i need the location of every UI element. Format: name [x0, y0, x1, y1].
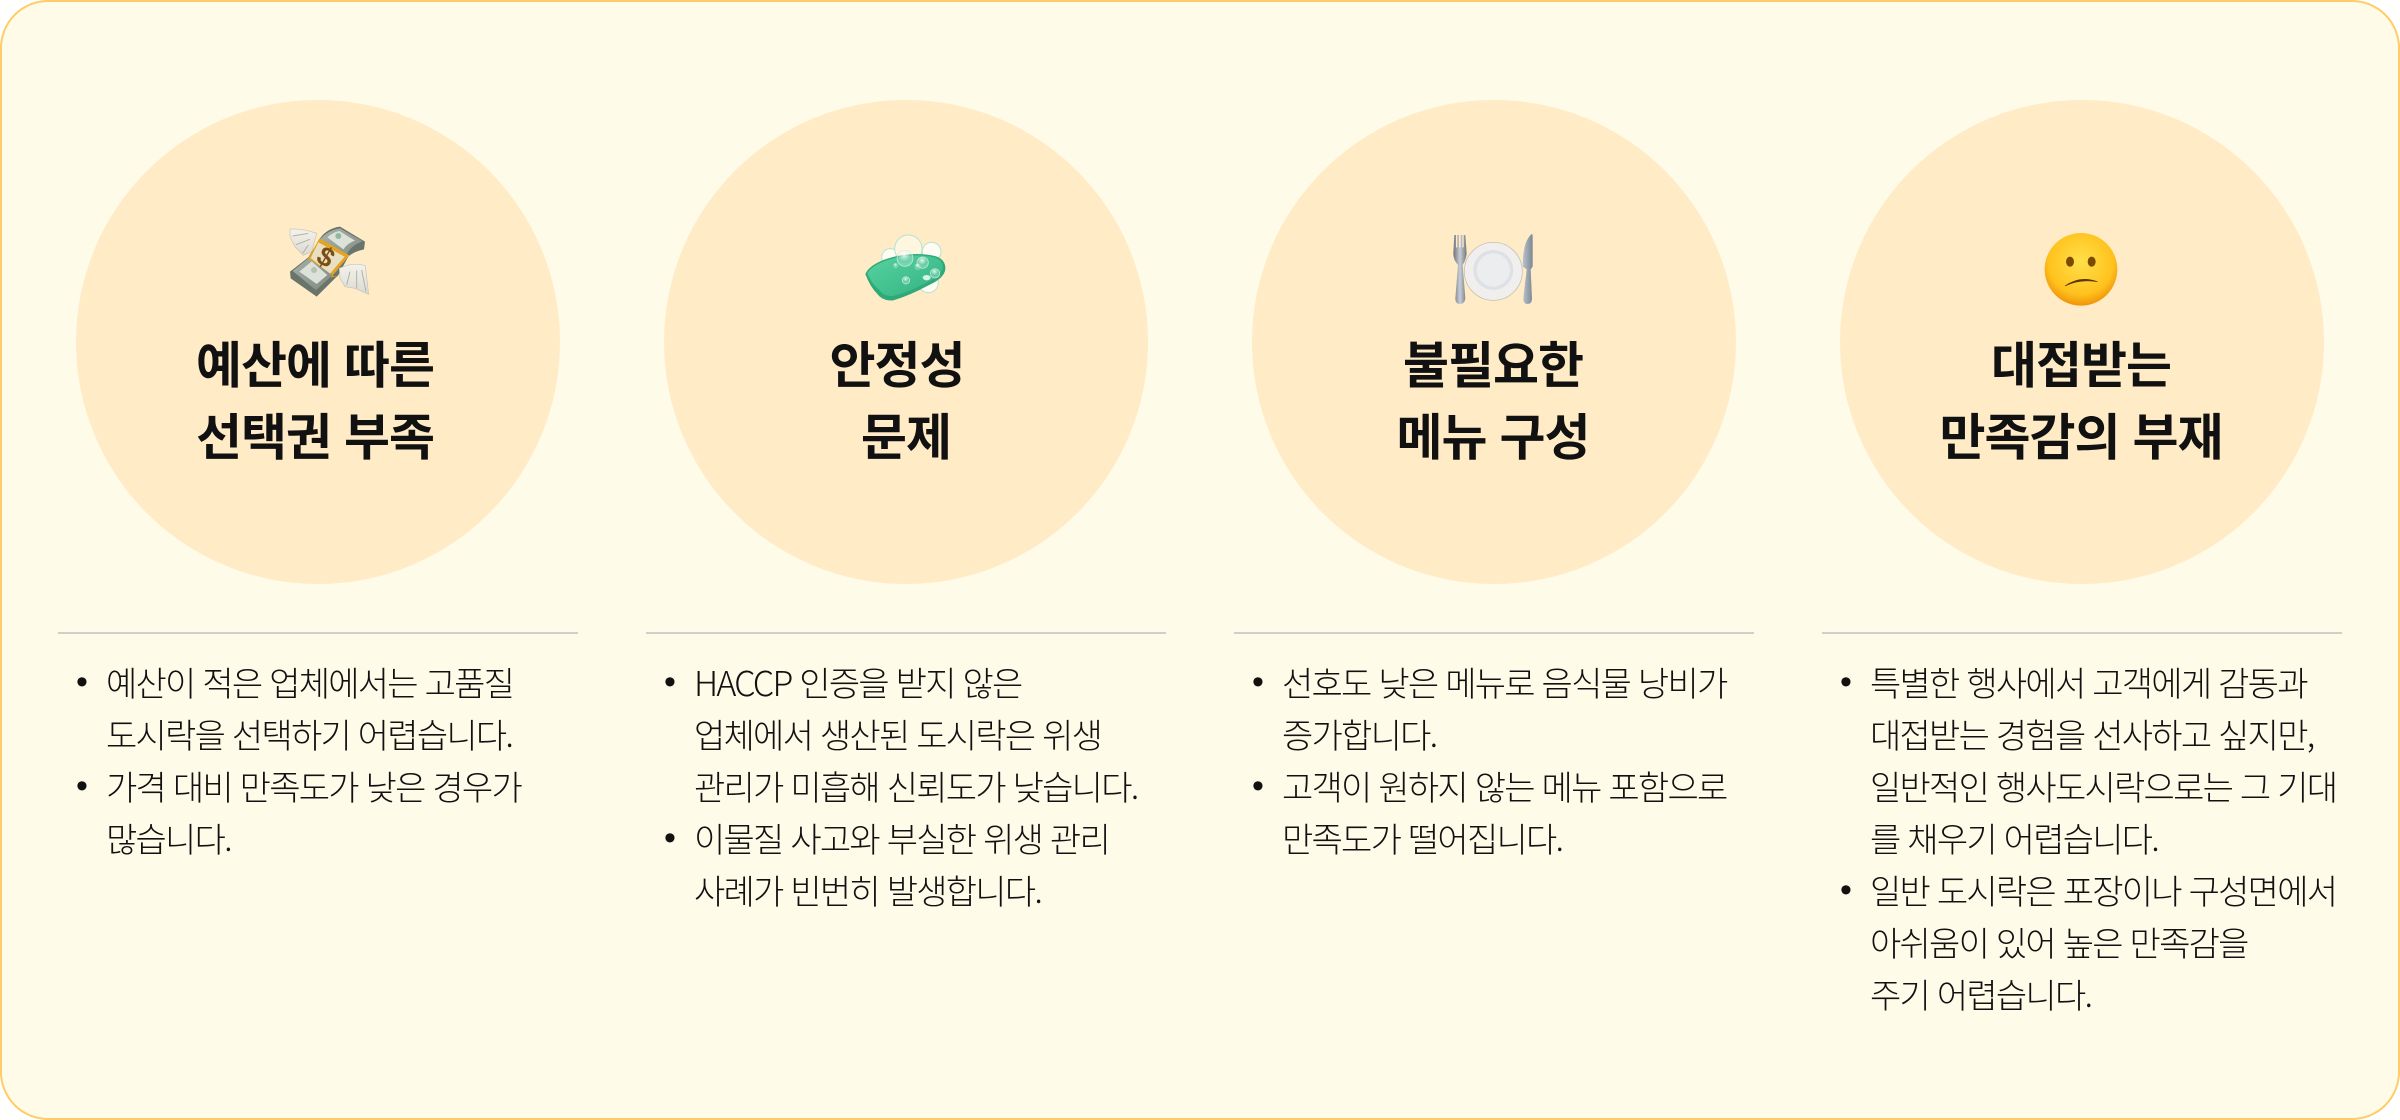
text: satisfaction bullets: 일반적인 행사도시락으로는 그 기대: [1870, 761, 2336, 810]
title: stability: [830, 326, 964, 470]
title: budget: [196, 326, 434, 470]
circle: budget: [76, 100, 560, 584]
divider: [1822, 632, 2342, 634]
text: satisfaction bullets: [1841, 657, 2336, 1018]
title: menu: [1396, 326, 1590, 470]
icon: soap: [865, 234, 946, 300]
icon: money with wings: $: [312, 239, 340, 274]
text: satisfaction bullets: 를 채우기 어렵습니다.: [1870, 813, 2158, 862]
title: stability: 문제: [861, 398, 951, 470]
text: stability bullets: [665, 657, 1138, 914]
text: satisfaction bullets: 일반 도시락은 포장이나 구성면에서: [1870, 865, 2336, 914]
icon: plate with cutlery: [1453, 234, 1533, 304]
text: stability bullets: 사례가 빈번히 발생합니다.: [694, 865, 1041, 914]
text: budget bullets: [77, 657, 522, 862]
circle: satisfaction: [1840, 100, 2324, 584]
title: budget: 예산에 따른: [196, 326, 434, 398]
title: budget: 선택권 부족: [196, 398, 434, 470]
text: satisfaction bullets: 대접받는 경험을 선사하고 싶지만,: [1870, 709, 2314, 758]
text: stability bullets: 업체에서 생산된 도시락은 위생: [694, 709, 1101, 758]
text: menu bullets: 선호도 낮은 메뉴로 음식물 낭비가: [1282, 657, 1726, 706]
title: satisfaction: [1940, 326, 2222, 470]
title: satisfaction: 만족감의 부재: [1940, 398, 2222, 470]
divider: [646, 632, 1166, 634]
icon: confused face: [2044, 233, 2118, 306]
text: stability bullets: 관리가 미흡해 신뢰도가 낮습니다.: [694, 761, 1138, 810]
divider: [58, 632, 578, 634]
icon: money with wings: [290, 226, 369, 297]
divider: [1234, 632, 1754, 634]
text: satisfaction bullets: 주기 어렵습니다.: [1870, 969, 2091, 1018]
title: menu: 메뉴 구성: [1396, 398, 1590, 470]
text: budget bullets: 예산이 적은 업체에서는 고품질: [106, 657, 513, 706]
text: menu bullets: 증가합니다.: [1282, 709, 1436, 758]
text: satisfaction bullets: 아쉬움이 있어 높은 만족감을: [1870, 917, 2248, 966]
circle: stability: [664, 100, 1148, 584]
title: menu: 불필요한: [1403, 326, 1583, 398]
text: budget bullets: 가격 대비 만족도가 낮은 경우가: [106, 761, 521, 810]
circle: menu: [1252, 100, 1736, 584]
text: menu bullets: 고객이 원하지 않는 메뉴 포함으로: [1282, 761, 1726, 810]
text: budget bullets: 많습니다.: [106, 813, 231, 862]
title: stability: 안정성: [830, 326, 964, 398]
text: budget bullets: 도시락을 선택하기 어렵습니다.: [106, 709, 512, 758]
text: stability bullets: 이물질 사고와 부실한 위생 관리: [694, 813, 1109, 862]
text: stability bullets: HACCP 인증을 받지 않은: [694, 657, 1022, 706]
text: satisfaction bullets: 특별한 행사에서 고객에게 감동과: [1870, 657, 2307, 706]
title: satisfaction: 대접받는: [1991, 326, 2171, 398]
text: menu bullets: [1253, 657, 1728, 862]
text: menu bullets: 만족도가 떨어집니다.: [1282, 813, 1562, 862]
